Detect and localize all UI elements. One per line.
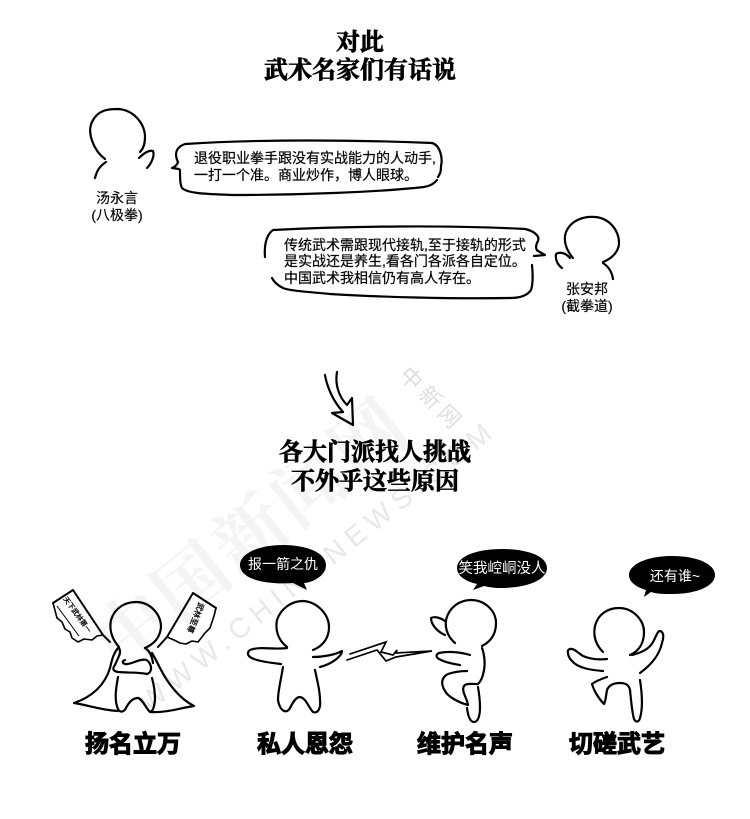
banner right — [158, 593, 216, 647]
banner left — [53, 590, 110, 642]
figure: 私人恩怨 — [248, 601, 342, 712]
watermark: 中国新闻网 — [80, 383, 425, 684]
quote text: 是实战还是养生,看各门各派各自定位。 — [284, 253, 526, 269]
banner right: 武林至尊 — [185, 601, 206, 635]
quote text: 传统武术需跟现代接轨,至于接轨的形式 — [284, 237, 526, 253]
name: 汤永言: (八极拳) — [91, 207, 143, 223]
speech bubble: 还有谁~: 还有谁~ — [650, 568, 700, 584]
quote text: 退役职业拳手跟没有实战能力的人动手, — [194, 150, 436, 166]
caption: 扬名立万: 扬名立万 — [85, 731, 181, 758]
caption: 私人恩怨: 私人恩怨 — [257, 731, 353, 758]
figure: 切磋武艺 — [568, 608, 663, 722]
name: 张安邦: 张安邦 — [566, 281, 608, 297]
heading — [279, 439, 471, 495]
name: 张安邦: (截拳道) — [561, 298, 613, 314]
quote text: 一打一个准。商业炒作，博人眼球。 — [194, 167, 418, 183]
speech bubble: 报一箭之仇: 报一箭之仇 — [248, 556, 318, 572]
figure: 张安邦 — [556, 217, 619, 314]
figure: 汤永言 — [90, 109, 154, 223]
speech bubble: 报一箭之仇 — [240, 545, 326, 590]
speech bubble: 笑我崆峒没人: 笑我崆峒没人 — [458, 560, 546, 577]
character — [110, 602, 161, 712]
heading: 不外乎这些原因 — [291, 468, 459, 495]
watermark: 中新网 — [394, 362, 469, 437]
quote text — [194, 150, 436, 183]
caption: 维护名声: 维护名声 — [417, 731, 513, 758]
title — [264, 29, 456, 84]
figure: 维护名声 — [431, 600, 496, 722]
speech bubble: 汤永言 — [172, 140, 442, 195]
caption: 切磋武艺: 切磋武艺 — [569, 731, 665, 758]
name: 汤永言: 汤永言 — [96, 190, 138, 206]
heading: 各大门派找人挑战 — [279, 439, 471, 466]
quote text: 中国武术我相信仍有高人存在。 — [284, 270, 480, 286]
watermark: WWW.CHINANEWS.COM — [133, 413, 503, 718]
quote text — [284, 237, 526, 286]
speech bubble: 笑我崆峒没人 — [457, 549, 547, 590]
name: 张安邦 — [561, 281, 613, 314]
speech bubble: 还有谁~ — [629, 556, 715, 597]
figure: 扬名立万 — [53, 590, 216, 712]
cape — [74, 648, 194, 712]
title: 武术名家们有话说 — [264, 56, 456, 84]
speech bubble: 张安邦 — [265, 226, 545, 298]
name: 汤永言 — [91, 190, 143, 223]
title: 对此 — [336, 29, 384, 56]
lightning bolt — [347, 642, 432, 661]
banner left: 天下武林第一 — [61, 595, 93, 634]
arrow — [325, 372, 353, 425]
